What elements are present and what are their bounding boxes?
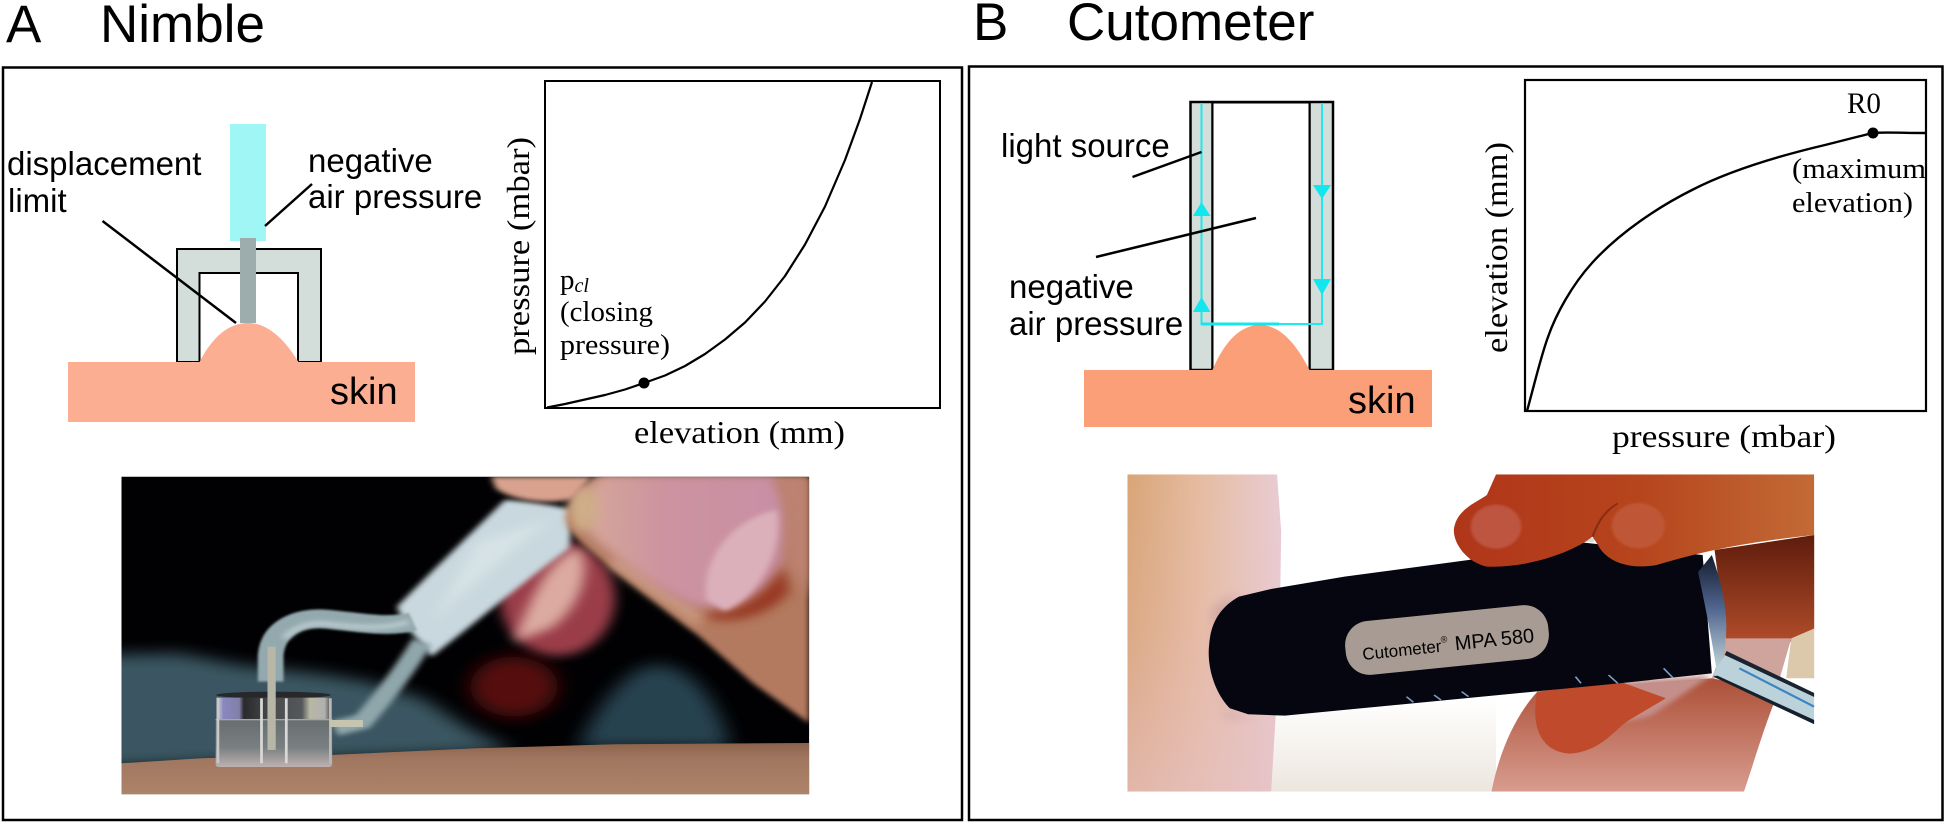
pointer: negative air pressure <box>1096 218 1256 257</box>
panel: Nimble frame <box>3 68 962 820</box>
arrows: light direction <box>1193 185 1331 326</box>
label: displacement limit: displacement <box>7 145 201 182</box>
x axis label: pressure (mbar) <box>1612 418 1836 454</box>
label: displacement limit: limit <box>8 182 67 219</box>
cyan tube reservoir <box>230 124 266 241</box>
point: closing pressure <box>638 378 650 388</box>
displacement limit rod <box>240 238 256 323</box>
device label text: MPA 580 <box>1454 625 1535 655</box>
skin bump <box>199 323 299 363</box>
label: negative air pressure: negative <box>308 142 433 179</box>
plot frame <box>1525 80 1926 411</box>
label: closing pressure: (closing <box>560 296 653 328</box>
light path <box>1202 103 1322 324</box>
skin bump <box>1212 325 1310 371</box>
label: negative air pressure: negative <box>1009 268 1134 305</box>
y axis label: pressure (mbar) <box>500 137 536 355</box>
chart: elevation vs pressure <box>1478 80 1926 454</box>
label: maximum elevation: (maximum <box>1792 153 1926 185</box>
label: R0: R0 <box>1847 87 1881 120</box>
probe walls <box>1190 102 1333 370</box>
label: skin: skin <box>330 371 398 413</box>
curve <box>1527 133 1925 411</box>
device label text: Cutometer <box>1361 637 1442 664</box>
skin block <box>1084 370 1432 427</box>
label: maximum elevation <box>1792 153 1926 219</box>
photo: Nimble device held on skin <box>96 475 809 794</box>
skin block <box>68 362 415 422</box>
label: closing pressure: pressure) <box>560 329 670 361</box>
label: closing pressure: cl <box>574 275 589 297</box>
label: closing pressure: p <box>560 264 574 296</box>
device label plate <box>1343 603 1551 677</box>
photo: Cutometer MPA 580 probe on arm <box>1127 474 1815 792</box>
housing <box>177 249 321 362</box>
device label text: ® <box>1440 634 1448 645</box>
probe interior <box>1214 104 1308 370</box>
heading: A Nimble <box>6 0 265 54</box>
chart: pressure vs elevation <box>500 81 940 450</box>
label: maximum elevation: elevation) <box>1792 187 1913 219</box>
label: light source: light source <box>1001 127 1170 164</box>
curve <box>547 82 872 408</box>
pointer: displacement limit <box>102 221 236 323</box>
x axis label: elevation (mm) <box>634 414 845 450</box>
diagram: Cutometer probe on skin <box>1001 102 1432 427</box>
label: closing pressure <box>560 264 670 361</box>
point: R0 <box>1868 128 1878 138</box>
label: skin: skin <box>1348 380 1416 422</box>
pointer: negative air pressure <box>265 184 312 226</box>
label: negative air pressure: air pressure <box>308 178 482 215</box>
y axis label: elevation (mm) <box>1478 142 1514 353</box>
pointer: light source <box>1132 152 1202 177</box>
diagram: Nimble device on skin <box>7 124 482 422</box>
plot frame <box>545 81 940 408</box>
label: negative air pressure: air pressure <box>1009 305 1183 342</box>
panel: Cutometer frame <box>969 66 1942 820</box>
